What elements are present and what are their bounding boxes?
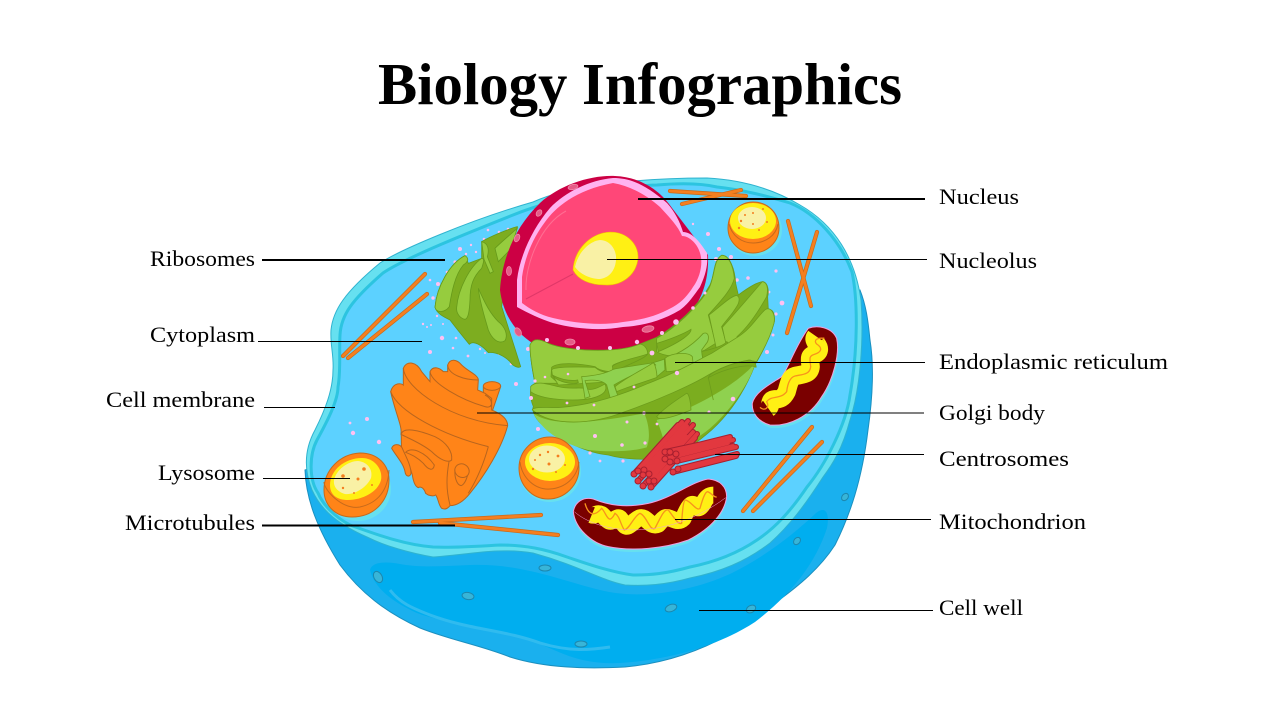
label: Golgi body: Golgi body [939, 400, 1045, 425]
label: Endoplasmic reticulum: Endoplasmic reticulum [939, 349, 1168, 374]
label: Centrosomes: Centrosomes [939, 446, 1069, 471]
nucleus [500, 176, 708, 356]
cell diagram [305, 176, 872, 668]
lysosome center [519, 437, 581, 502]
label: Cytoplasm: Cytoplasm [150, 322, 255, 347]
title: Biology Infographics [378, 51, 902, 117]
lysosome left [324, 453, 391, 521]
label: Cell well: Cell well [939, 595, 1023, 620]
endoplasmic reticulum left [435, 227, 521, 367]
label: Cell membrane: Cell membrane [106, 387, 255, 412]
leader lines [258, 199, 933, 610]
mitochondrion lower [573, 479, 727, 552]
ribosomes [349, 223, 784, 444]
label: Nucleolus: Nucleolus [939, 248, 1037, 273]
microtubules [343, 190, 822, 535]
cell membrane [306, 178, 862, 585]
golgi body [391, 360, 508, 509]
label: Mitochondrion: Mitochondrion [939, 509, 1086, 534]
nuclear pores [506, 184, 654, 345]
ribosomes on reticulum [529, 292, 735, 463]
label: Microtubules: Microtubules [125, 510, 255, 535]
nucleolus [573, 232, 638, 285]
label: Nucleus: Nucleus [939, 184, 1019, 209]
wall pores [372, 492, 850, 647]
lysosome top right [728, 202, 782, 256]
label: Ribosomes: Ribosomes [150, 246, 255, 271]
mitochondrion right [752, 327, 839, 428]
cytoplasm [311, 184, 856, 575]
label: Lysosome: Lysosome [158, 460, 255, 485]
cell wall [305, 290, 872, 668]
centrosomes [631, 421, 737, 490]
endoplasmic reticulum right [530, 255, 774, 459]
